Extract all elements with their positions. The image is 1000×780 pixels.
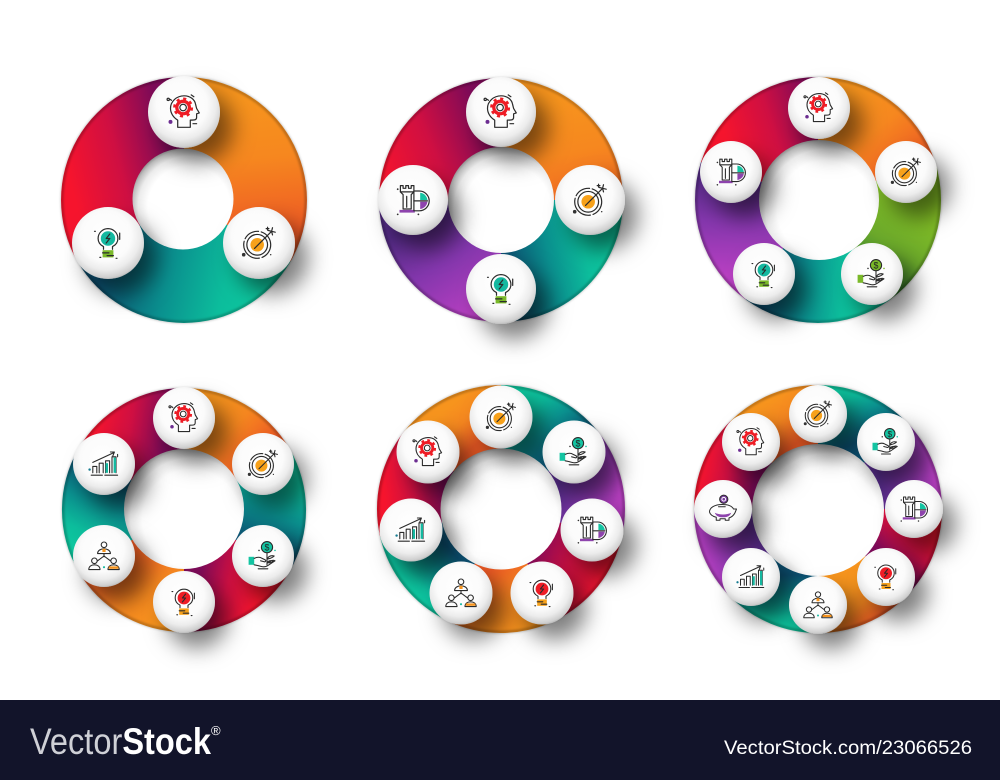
ball: hand with plant (232, 525, 294, 587)
ball: target (470, 386, 532, 448)
ball: tower with pie chart (700, 141, 762, 203)
footer banner (0, 700, 1000, 780)
panel: seven-step ring (377, 385, 625, 633)
ball: piggy bank (694, 480, 752, 538)
ball: hand with plant (857, 413, 915, 471)
ball: light bulb (153, 571, 215, 633)
ring segments (61, 77, 307, 323)
ball: head with gear (148, 76, 220, 148)
ring segments (695, 77, 941, 323)
centre hole (448, 147, 554, 253)
centre hole (132, 148, 234, 250)
ball: light bulb (72, 207, 144, 279)
ball: tower with pie chart (885, 480, 943, 538)
panel: five-step ring (695, 77, 941, 323)
logo text: VectorStock (30, 721, 211, 762)
ball: light bulb (857, 548, 915, 606)
ball: light bulb (466, 254, 536, 324)
ring segments (379, 78, 623, 322)
ball: target (555, 165, 625, 235)
panel: six-step ring (62, 387, 306, 633)
ball: target (232, 433, 294, 495)
image id: VectorStock.com/23066526 (724, 738, 972, 759)
ball: team (430, 562, 492, 624)
ball: head with gear (466, 77, 536, 147)
ring segments (377, 385, 625, 633)
centre hole (440, 448, 562, 570)
ring segments (62, 388, 306, 632)
ball: tower with pie chart (560, 498, 624, 562)
ball: target (789, 385, 847, 443)
ball: target (223, 207, 295, 279)
ball: light bulb (510, 562, 574, 624)
ball: head with gear (788, 77, 850, 139)
ball: team (789, 576, 847, 634)
panel: three-step ring (61, 76, 307, 323)
ball: hand with plant (542, 420, 606, 484)
ball: head with gear (396, 420, 460, 484)
panel: four-step ring (378, 77, 625, 324)
ball: target (875, 141, 937, 203)
registered mark: ® (211, 723, 221, 738)
ball: bar chart (380, 498, 442, 562)
ball: bar chart (722, 548, 780, 606)
centre hole (752, 444, 884, 576)
centre hole (759, 140, 879, 260)
ball: hand with plant (841, 243, 903, 305)
ball: team (73, 525, 135, 587)
ball: head with gear (722, 413, 780, 471)
panel: eight-step ring (694, 385, 943, 634)
ball: bar chart (73, 433, 135, 495)
ball: head with gear (153, 387, 215, 449)
ball: light bulb (733, 243, 795, 305)
ball: tower with pie chart (378, 165, 448, 235)
ring segments (694, 385, 942, 633)
centre hole (124, 449, 244, 569)
